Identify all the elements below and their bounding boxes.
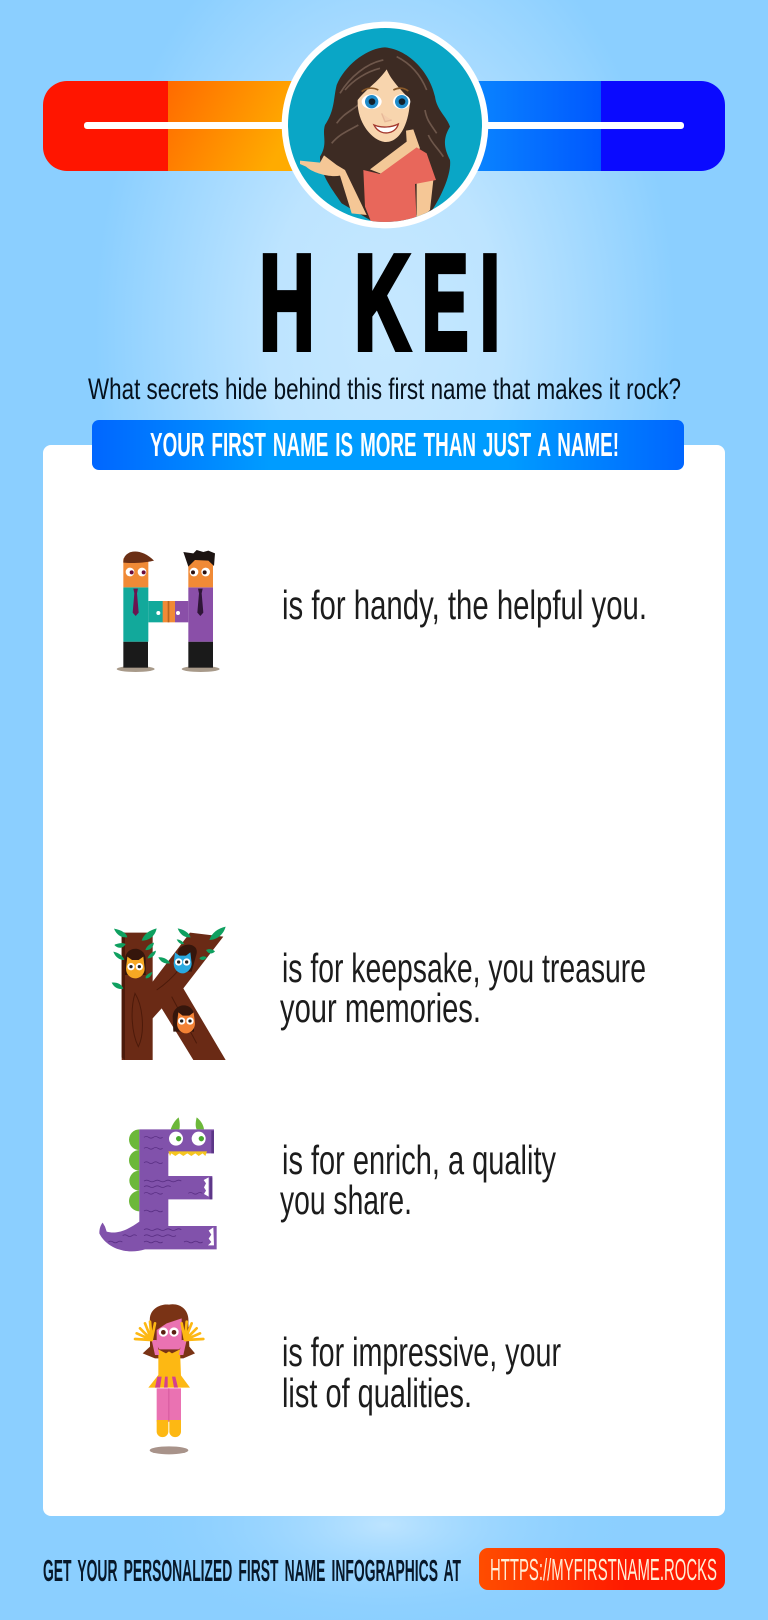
text: E lines [280, 1137, 556, 1223]
text: I lines: is for impressive, your [282, 1329, 561, 1375]
avatar: woman in circle [282, 22, 488, 228]
icon: letter K, tree with owls [112, 927, 226, 1060]
panel: white content card [43, 445, 725, 1516]
header gradient bar [43, 81, 725, 171]
text: E lines: you share. [280, 1177, 412, 1223]
icon: letter H, two businessmen [117, 550, 220, 672]
title: K [354, 227, 410, 378]
text: K lines: your memories. [280, 985, 481, 1031]
title: E [422, 227, 468, 378]
title: I [480, 227, 500, 378]
title: H [259, 227, 314, 378]
icon: letter E, purple monster [99, 1117, 217, 1251]
footer url button [479, 1548, 725, 1590]
text: I lines [282, 1329, 561, 1416]
banner [92, 420, 684, 470]
text: K lines [280, 945, 646, 1031]
icon: letter I, cheerleader girl [135, 1304, 203, 1454]
text: I lines: list of qualities. [282, 1370, 472, 1416]
text: E lines: is for enrich, a quality [282, 1137, 556, 1183]
